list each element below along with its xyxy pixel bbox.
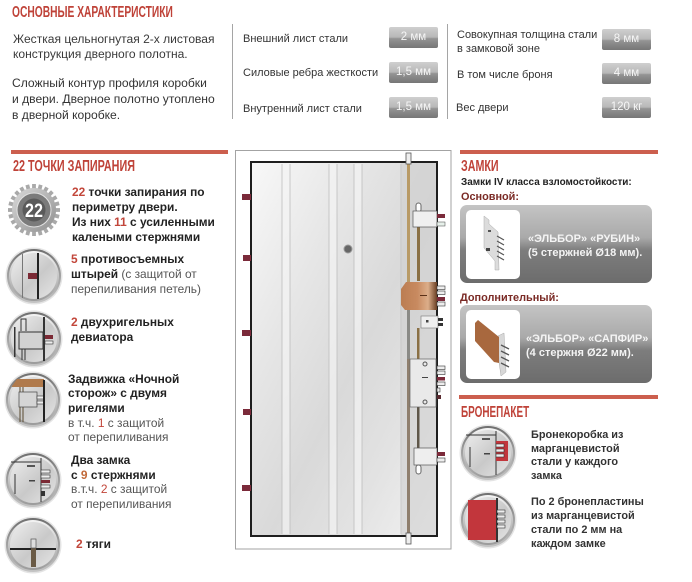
text block: 5 pins [71,252,201,296]
copper armor box lock [401,282,445,310]
panel: additional lock card [460,305,652,383]
text block: 2 rods: 2 тяги [76,537,111,551]
bottom deviator [414,448,445,474]
icon: two locks circle [4,452,62,508]
label: outer sheet: Внешний лист стали [243,33,348,45]
text block: 22 locking points: периметру двери. [72,200,178,214]
text: elbor sapfir: «ЭЛЬБОР» «САПФИР» [526,333,648,345]
text block: 5 pins: штырей (с защитой от [71,267,197,281]
text block: armor box: марганцевистой [531,443,620,455]
icon: deviator circle [6,310,62,368]
text block: armor box: замка [531,470,562,482]
text block: 2 deviators [71,315,174,344]
text block: armor plates: стали по 2 мм на [531,524,622,536]
icon: additional lock photo [466,310,520,379]
heading: 22 locking points: 22 ТОЧКИ ЗАПИРАНИЯ [13,158,135,175]
badge: 4 mm [602,63,651,84]
label: inner sheet: Внутренний лист стали [243,103,362,115]
text block: 2 deviators: девиатора [71,330,133,344]
text block: 22 locking points [72,185,215,244]
top deviator [413,203,445,227]
text block: night guard latch: сторож» с двумя [68,386,167,400]
text block: armor plates: По 2 бронепластины [531,496,644,508]
text block: 22 locking points: 22 точки запирания по [72,185,205,199]
panel: main lock card [460,205,652,283]
label: door weight: Вес двери [456,102,509,114]
badge: 2 mm: 2 мм [401,31,426,43]
text block: two locks: с 9 стержнями [71,468,156,482]
label: total thickness: Совокупная толщина стали [457,29,597,41]
text block: profile: и двери. Дверное полотно утоплено [12,92,215,106]
panel: steel sheet specs [232,24,438,119]
badge: 120 kg: 120 кг [611,101,642,113]
anti-removal pins [242,194,251,491]
icon: anti-removal pin circle [6,248,62,304]
text block: armor box: Бронекоробка из [531,429,623,441]
text block: night guard latch: в т.ч. 1 с защитой [68,416,164,430]
door leaf [251,162,437,536]
text block: night guard latch: ригелями [68,401,125,415]
badge: 8 mm [602,29,651,50]
text block: construction: конструкция дверного полотна. [13,46,188,60]
text block: armor box: стали у каждого [531,456,618,468]
icon: armor plates circle [460,492,516,548]
text block: night guard latch: от перепиливания [68,430,168,444]
text block: 2 deviators: 2 двухригельных [71,315,174,329]
vertical rods [406,153,420,544]
text block: night guard latch [68,372,179,444]
label: main lock: Основной: [461,191,519,203]
label: ribs: Силовые ребра жесткости [243,67,378,79]
door viewer [344,245,352,253]
label: total thickness: в замковой зоне [457,43,540,55]
badge: 1.5 mm inner: 1,5 мм [396,101,431,113]
text block: construction: Жесткая цельногнутая 2-х листовая [13,32,215,46]
text block: night guard latch: Задвижка «Ночной [68,372,179,386]
label: armor: В том числе броня [457,69,553,81]
badge: 2 mm [389,27,438,48]
text: lock class: Замки IV класса взломостойкости: [461,177,632,188]
icon: armor box circle [460,424,516,482]
text block: armor box [531,429,623,482]
text block: profile: Сложный контур профиля коробки [12,76,207,90]
icon: gear with 22: 22 [25,201,43,222]
heading: armor package: БРОНЕПАКЕТ [461,404,529,421]
text: 5 bolts: (5 стержней Ø18 мм). [528,247,642,259]
icon: gear with 22 [8,184,60,236]
text block: 22 locking points: Из них 11 с усиленными [72,215,215,229]
label: total thickness [457,29,597,55]
icon: rods circle [4,516,62,574]
heading: locks: ЗАМКИ [461,158,499,175]
panel: main characteristics text [12,4,215,122]
text block: two locks [71,453,171,511]
heading: main characteristics: ОСНОВНЫЕ ХАРАКТЕРИСТИКИ [12,4,173,21]
badge: 1.5 mm ribs: 1,5 мм [396,66,431,78]
main lock [410,359,445,407]
text block: 5 pins: 5 противосъемных [71,252,184,266]
badge: 4 mm: 4 мм [614,67,639,79]
text block: armor plates [531,496,644,550]
badge: 8 mm: 8 мм [614,33,639,45]
text block: two locks: в.т.ч. 2 с защитой [71,482,167,496]
text block: armor plates: каждом замке [531,538,606,550]
badge: 120 kg [602,97,651,118]
text block: profile: в дверной коробке. [12,108,120,122]
badge: 1.5 mm inner [389,97,438,118]
panel: total thickness specs [447,24,651,119]
badge: 1.5 mm ribs [389,62,438,83]
text block: 22 locking points: калеными стержнями [72,230,200,244]
text block: two locks: от перепиливания [71,497,171,511]
text block: 5 pins: перепиливания петель) [71,282,201,296]
text: 4 bolts: (4 стержня Ø22 мм). [526,347,634,359]
text block: two locks: Два замка [71,453,130,467]
text block: armor plates: из марганцевистой [531,510,635,522]
icon: night guard circle [4,372,62,428]
text block: construction [13,32,215,60]
label: additional lock: Дополнительный: [460,292,559,304]
text: elbor rubin: «ЭЛЬБОР» «РУБИН» [528,233,640,245]
text block: profile [12,76,215,122]
icon: main lock photo [466,210,520,279]
panel: door diagram [235,150,452,550]
night latch [421,316,443,328]
